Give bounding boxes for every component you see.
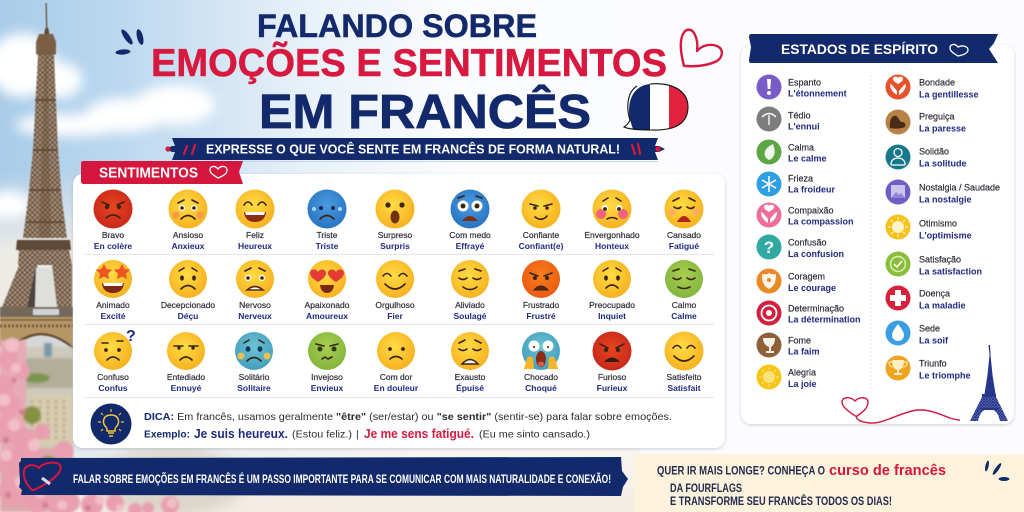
state: Tédio: L'ennui — [788, 122, 820, 132]
icon: small Eiffel tower — [970, 345, 1008, 421]
state: Triunfo — [886, 356, 971, 380]
decorative sparks: title left — [115, 28, 145, 55]
icon: heart with red line — [842, 398, 960, 423]
tip text: (Eu me sinto cansado.) — [479, 428, 590, 440]
emoji: Confuso: Confuso — [97, 372, 129, 382]
state: Triunfo: Le triomphe — [919, 370, 971, 380]
emoji: Com medo: Com medo — [449, 230, 491, 240]
state: Fome: La faim — [788, 346, 820, 356]
emoji: Animado: Animado — [96, 300, 130, 310]
emoji: Decepcionado — [161, 260, 215, 321]
emoji: Confiante — [519, 190, 564, 251]
emoji: Satisfeito: Satisfeito — [667, 372, 702, 382]
state: Calma — [756, 140, 827, 164]
state: Preguiça: Preguiça — [919, 112, 955, 122]
state: Alegria: Alegria — [788, 368, 816, 378]
emoji: Confuso: ? — [126, 328, 136, 345]
emoji: Satisfeito — [664, 332, 704, 393]
panel: sentimentos — [73, 174, 725, 448]
emoji: Apaixonado: Apaixonado — [305, 300, 350, 310]
state: Calma: Le calme — [788, 154, 827, 164]
state: Doença — [886, 286, 966, 310]
emoji: Confuso: Confus — [98, 383, 128, 393]
title: FALANDO SOBRE — [257, 8, 537, 44]
state: Fome: Fome — [788, 336, 811, 346]
state: Determinação: Determinação — [788, 304, 844, 314]
callout: curso de francês: QUER IR MAIS LONGE? CONHEÇA O — [657, 464, 825, 478]
tip text: | — [356, 428, 359, 440]
emoji: Surpreso: Surpris — [380, 241, 410, 251]
emoji: Animado: Excité — [100, 311, 126, 321]
emoji: Com dor — [374, 332, 419, 393]
emoji: Nervoso: Nerveux — [238, 311, 272, 321]
tip text: DICA: Em francês, usamos geralmente "être" (ser/estar) ou "se sentir" (sentir-se) para falar sobre emoções. — [144, 411, 672, 423]
state: Frieza: Frieza — [788, 174, 813, 184]
title: EM FRANCÊS — [259, 84, 591, 139]
state: Bondade: Bondade — [919, 78, 955, 88]
emoji: Com medo: Effrayé — [456, 241, 485, 251]
emoji: Ansioso — [168, 190, 208, 251]
state: Coragem — [756, 268, 836, 294]
state: Nostalgia: La nostalgie — [919, 194, 972, 204]
emoji: Solitário — [235, 332, 273, 393]
state: Sede — [886, 320, 949, 346]
state: Nostalgia — [886, 180, 1000, 204]
state: Doença: Doença — [919, 288, 950, 298]
emoji: Triste: Triste — [316, 241, 339, 251]
callout: curso de francês — [634, 454, 1024, 512]
panel: estados de espirito — [741, 45, 1014, 424]
emoji: Frustrado: Frustrado — [523, 300, 559, 310]
heading ribbon: estados de espirito — [749, 34, 998, 63]
state: Solidão — [886, 144, 967, 170]
emoji: Decepcionado: Déçu — [178, 311, 198, 321]
emoji: Bravo — [94, 190, 132, 251]
state: Coragem: Le courage — [788, 283, 836, 293]
tip text: Je me sens fatigué. — [364, 427, 474, 441]
emoji: Preocupado: Inquiet — [598, 311, 626, 321]
subtitle ribbon — [165, 138, 665, 162]
state: Confusão — [756, 234, 844, 260]
emoji: Furioso: Furieux — [597, 383, 628, 393]
callout: curso de francês: curso de francês — [829, 462, 946, 479]
state: Determinação: La détermination — [788, 314, 861, 324]
emoji: Aliviado — [451, 260, 489, 321]
state: Satisfação: La satisfaction — [919, 266, 982, 276]
state: Sede: La soif — [919, 336, 949, 346]
icon: lightbulb — [90, 404, 132, 444]
emoji: Com dor: Com dor — [380, 372, 412, 382]
emoji: Triste — [308, 190, 346, 251]
emoji: Surpreso — [376, 190, 414, 251]
state: Bondade — [886, 74, 979, 100]
emoji: Apaixonado — [305, 260, 350, 321]
emoji: Exausto: Épuisé — [456, 383, 484, 393]
state: Confusão: ? — [764, 238, 774, 257]
emoji: Ansioso: Anxieux — [171, 241, 205, 251]
state: Solidão: Solidão — [919, 146, 949, 156]
emoji: Furioso — [592, 332, 632, 393]
state: Otimismo — [886, 214, 972, 240]
emoji: Chocado: Chocado — [524, 372, 558, 382]
subtitle ribbon: EXPRESSE O QUE VOCÊ SENTE EM FRANCÊS DE FORMA NATURAL! — [206, 142, 620, 156]
state: Otimismo: L'optimisme — [919, 230, 972, 240]
emoji: Nervoso — [236, 260, 274, 321]
state: Calma: Calma — [788, 142, 814, 152]
emoji: Chocado: Choqué — [525, 383, 557, 393]
heading ribbon: sentimentos — [81, 161, 243, 184]
emoji: Entediado — [167, 332, 205, 393]
state: Otimismo: Otimismo — [919, 218, 957, 228]
state: Compaixão: Compaixão — [788, 206, 834, 216]
state: Tédio — [756, 106, 820, 132]
icon: France flag speech bubble — [623, 84, 688, 130]
state: Bondade: La gentillesse — [919, 90, 979, 100]
emoji: Aliviado: Soulagé — [453, 311, 487, 321]
emoji: Triste: Triste — [317, 230, 338, 240]
state: Compaixão — [756, 202, 854, 228]
callout: curso de francês: E TRANSFORME SEU FRANCÊS TODOS OS DIAS! — [670, 495, 892, 508]
emoji: Confiante: Confiant(e) — [519, 241, 564, 251]
emoji: Cansado: Cansado — [667, 230, 701, 240]
emoji: Confiante: Confiante — [523, 230, 559, 240]
state: Espanto: Espanto — [788, 78, 821, 88]
emoji: Surpreso: Surpreso — [378, 230, 413, 240]
state: Preguiça: La paresse — [919, 124, 966, 134]
state: Compaixão: La compassion — [788, 216, 854, 226]
state: Confusão: Confusão — [788, 238, 827, 248]
emoji: Envergonhado — [584, 190, 640, 251]
emoji: Solitário: Solitaire — [237, 383, 271, 393]
emoji: Cansado — [664, 190, 704, 251]
emoji: Feliz — [236, 190, 274, 251]
emoji: Frustrado: Frustré — [526, 311, 556, 321]
Paris buildings and garden — [0, 340, 73, 512]
emoji: Exausto: Exausto — [455, 372, 486, 382]
emoji: Calmo — [665, 260, 703, 321]
state: Satisfação — [886, 252, 982, 276]
emoji: Bravo: En colère — [94, 241, 132, 251]
emoji: Orgulhoso: Fier — [387, 311, 403, 321]
state: Confusão: La confusion — [788, 249, 844, 259]
state: Tédio: Tédio — [788, 110, 811, 120]
bottom banner — [19, 457, 628, 496]
state: Satisfação: Satisfação — [919, 254, 961, 264]
tip text: Exemplo: — [144, 428, 190, 440]
tip text — [144, 411, 672, 441]
state: Preguiça — [886, 110, 966, 134]
emoji: Invejoso: Envieux — [311, 383, 344, 393]
emoji: Calmo: Calme — [671, 311, 697, 321]
emoji: Orgulhoso — [375, 260, 415, 321]
emoji: Confuso — [94, 328, 136, 393]
state: Frieza: La froideur — [788, 184, 836, 194]
emoji: Frustrado — [522, 260, 560, 321]
state: Espanto — [756, 74, 847, 100]
emoji: Com medo — [449, 190, 491, 251]
emoji: Feliz: Heureux — [238, 241, 272, 251]
emoji: Solitário: Solitário — [239, 372, 270, 382]
emoji: Exausto — [451, 332, 489, 393]
emoji: Envergonhado: Envergonhado — [584, 230, 640, 240]
state: Espanto: L'étonnement — [788, 88, 847, 98]
state: Solidão: La solitude — [919, 158, 967, 168]
callout: curso de francês: DA FOURFLAGS — [670, 483, 742, 495]
emoji: Preocupado: Preocupado — [589, 300, 635, 310]
state: Determinação — [756, 300, 861, 326]
emoji: Calmo: Calmo — [672, 300, 697, 310]
emoji: Invejoso — [308, 332, 346, 393]
emoji: Envergonhado: Honteux — [595, 241, 629, 251]
emoji: Preocupado — [589, 260, 635, 321]
state: Coragem: Coragem — [788, 272, 825, 282]
state: Nostalgia: Nostalgia / Saudade — [919, 182, 1000, 192]
tip text: Je suis heureux. — [194, 427, 288, 441]
emoji: Orgulhoso: Orgulhoso — [375, 300, 415, 310]
state: Triunfo: Triunfo — [919, 358, 947, 368]
emoji: Chocado — [522, 332, 560, 393]
emoji: Feliz: Feliz — [246, 230, 264, 240]
emoji: Decepcionado: Decepcionado — [161, 300, 215, 310]
emoji: Bravo: Bravo — [102, 230, 124, 240]
state: Frieza — [756, 172, 836, 196]
tip text: (Estou feliz.) — [292, 428, 352, 440]
emoji: Ansioso: Ansioso — [173, 230, 203, 240]
title — [151, 8, 667, 139]
state: Fome — [756, 332, 820, 358]
emoji: Animado — [94, 260, 132, 321]
heading ribbon: sentimentos: SENTIMENTOS — [99, 166, 198, 182]
state: Alegria: La joie — [788, 379, 817, 389]
state: Sede: Sede — [919, 324, 940, 334]
emoji: Entediado: Entediado — [167, 372, 205, 382]
emoji: Satisfeito: Satisfait — [667, 383, 701, 393]
cherry blossoms — [0, 338, 179, 512]
heading ribbon: estados de espirito: ESTADOS DE ESPÍRITO — [781, 41, 938, 57]
bottom banner: FALAR SOBRE EMOÇÕES EM FRANCÊS É UM PASSO IMPORTANTE PARA SE COMUNICAR COM MAIS NATURALIDADE E CONEXÃO! — [73, 471, 611, 486]
icon: red heart outline — [681, 30, 722, 66]
emoji: Com dor: En douleur — [374, 383, 419, 393]
emoji: Cansado: Fatigué — [669, 241, 699, 251]
title: EMOÇÕES E SENTIMENTOS — [151, 41, 667, 85]
emoji: Furioso: Furioso — [598, 372, 626, 382]
state: Doença: La maladie — [919, 300, 966, 310]
state: Alegria — [756, 364, 817, 390]
emoji: Invejoso: Invejoso — [311, 372, 343, 382]
emoji: Apaixonado: Amoureux — [306, 311, 348, 321]
icon: sparks — [984, 460, 1010, 481]
emoji: Nervoso: Nervoso — [239, 300, 271, 310]
Eiffel tower photo — [0, 3, 73, 360]
emoji: Entediado: Ennuyé — [171, 383, 202, 393]
emoji: Aliviado: Aliviado — [455, 300, 485, 310]
